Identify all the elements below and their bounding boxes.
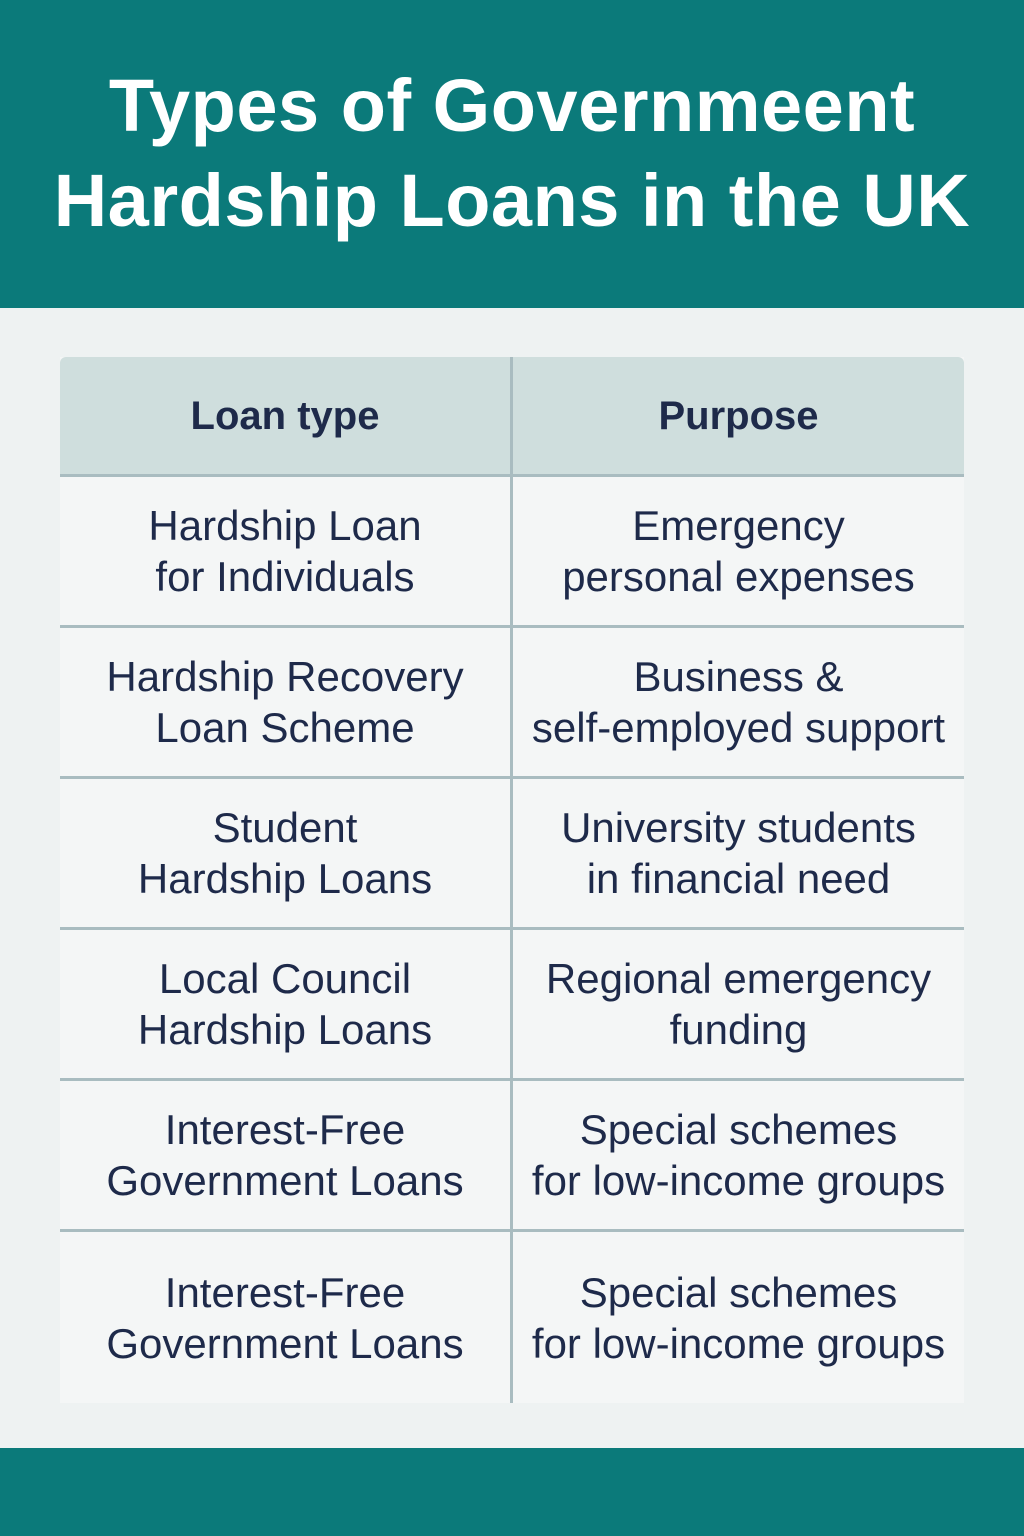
row 1 loan: for Individuals: [155, 553, 415, 600]
row 3 loan: [138, 804, 432, 902]
row 2 purpose: self-employed support: [532, 704, 945, 751]
row 5 purpose: for low-income groups: [532, 1157, 945, 1204]
row 3 purpose: University students: [561, 804, 916, 851]
footer band: [0, 1448, 1024, 1536]
row 5 purpose: [532, 1106, 945, 1204]
row 3 loan: Student: [213, 804, 357, 851]
row 5 purpose: Special schemes: [580, 1106, 897, 1153]
title: [54, 64, 970, 242]
row 1 purpose: [562, 502, 915, 600]
table: loan types: [60, 357, 964, 1403]
row 2 loan: Hardship Recovery: [106, 653, 464, 700]
header band: [0, 0, 1024, 308]
title: Hardship Loans in the UK: [54, 159, 970, 242]
row 3 loan: Hardship Loans: [138, 855, 432, 902]
row 5 loan: Interest-Free: [165, 1106, 405, 1153]
row 1 purpose: personal expenses: [562, 553, 915, 600]
row 4 purpose: [546, 955, 931, 1053]
title: Types of Governmeent: [109, 64, 915, 147]
row 2 loan: Loan Scheme: [155, 704, 415, 751]
row 6 loan: Interest-Free: [165, 1268, 405, 1316]
row 4 loan: Local Council: [159, 955, 411, 1002]
row 6 purpose: [532, 1268, 945, 1366]
row 2 purpose: Business &: [633, 653, 844, 700]
row 4 loan: [138, 955, 432, 1053]
row 2 loan: [106, 653, 464, 751]
row 5 loan: [106, 1106, 464, 1204]
row 3 purpose: in financial need: [587, 855, 890, 902]
row 6 purpose: Special schemes: [580, 1268, 897, 1316]
row 6 loan: [106, 1268, 464, 1366]
header: Purpose: Purpose: [658, 394, 819, 438]
row 1 purpose: Emergency: [632, 502, 845, 549]
row 1 loan: Hardship Loan: [148, 502, 422, 549]
row 1 loan: [148, 502, 422, 600]
table header row: [60, 357, 964, 475]
row 6 loan: Government Loans: [106, 1320, 464, 1366]
row 4 loan: Hardship Loans: [138, 1006, 432, 1053]
row 4 purpose: Regional emergency: [546, 955, 931, 1002]
header: Loan type: Loan type: [191, 394, 379, 438]
row 3 purpose: [561, 804, 916, 902]
row 6 purpose: for low-income groups: [532, 1320, 945, 1366]
row 4 purpose: funding: [670, 1006, 807, 1053]
row 5 loan: Government Loans: [106, 1157, 464, 1204]
row 2 purpose: [532, 653, 945, 751]
